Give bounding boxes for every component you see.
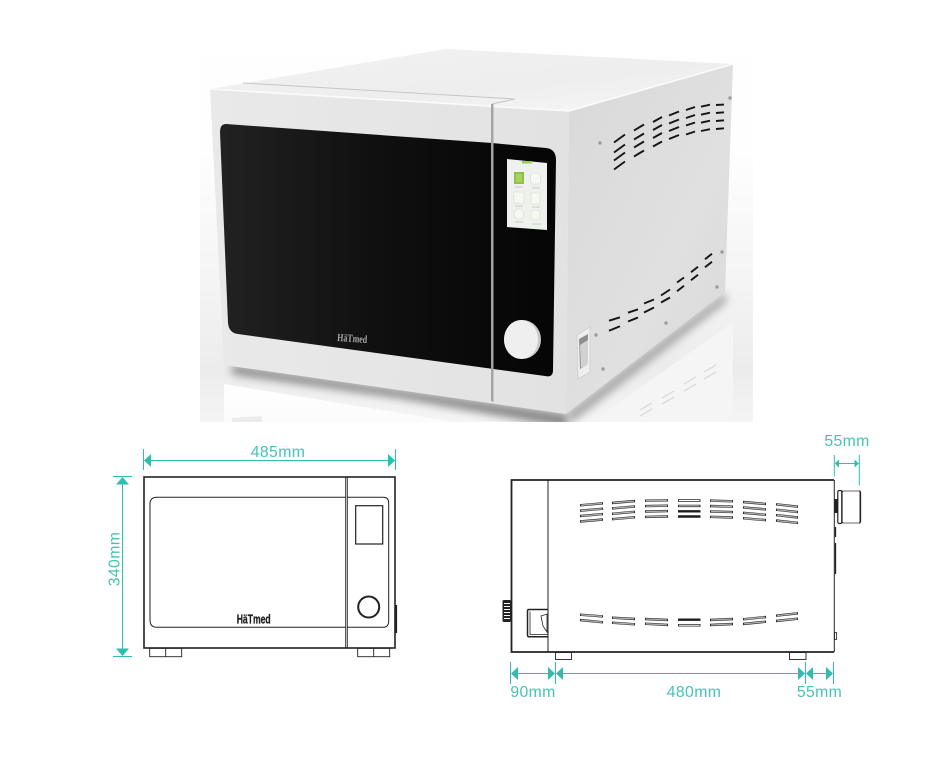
side handle outline (528, 610, 548, 637)
front control panel outline (347, 497, 389, 627)
door seam (243, 83, 515, 104)
door divider (491, 104, 494, 402)
upper vents on side view (580, 500, 798, 523)
side view drawing (502, 480, 860, 660)
rear cap dimension: 55mm (824, 433, 870, 450)
90mm label: 90mm (510, 684, 556, 701)
side feet (556, 652, 806, 660)
front knob (358, 596, 379, 618)
front screen outline (356, 506, 383, 544)
front body outline (144, 477, 395, 648)
front door divider (346, 477, 347, 648)
side screws (594, 96, 732, 371)
lower side vents (609, 254, 712, 331)
product photo (200, 49, 753, 422)
side back edge (833, 480, 835, 652)
height dimension (106, 476, 132, 656)
floor shadow (232, 292, 726, 428)
front window outline (150, 497, 346, 627)
touch screen (507, 159, 547, 230)
front feet (150, 648, 390, 657)
rear details (834, 527, 836, 574)
device front panel (210, 89, 569, 414)
edge highlights (210, 64, 733, 111)
width dimension: 485mm (251, 444, 305, 461)
90mm arrows (511, 667, 555, 680)
door seam (547, 480, 549, 652)
upper side vents (614, 105, 724, 170)
side body outline (512, 480, 834, 652)
depth dimensions (510, 662, 842, 701)
device top panel (210, 49, 733, 111)
height dimension: 340mm (106, 532, 124, 586)
lower vents on side view (580, 613, 798, 625)
black glass window (220, 124, 556, 376)
floor reflection (224, 362, 733, 422)
55mm label: 55mm (797, 684, 842, 701)
width dimension (144, 444, 396, 470)
logo on glass: HäTmed (337, 332, 368, 346)
480mm arrows (556, 667, 805, 680)
front view drawing (144, 477, 397, 657)
rear cap dimension (824, 433, 870, 486)
device right side panel (566, 64, 733, 414)
55mm arrows (806, 667, 833, 680)
front side protrusion (395, 605, 397, 633)
dial knob (504, 320, 541, 359)
rear protruding cap (834, 490, 860, 524)
480mm label: 480mm (667, 684, 721, 701)
side dial knob (502, 600, 511, 622)
side handle (577, 327, 590, 379)
front logo: HäTmed (237, 612, 271, 626)
